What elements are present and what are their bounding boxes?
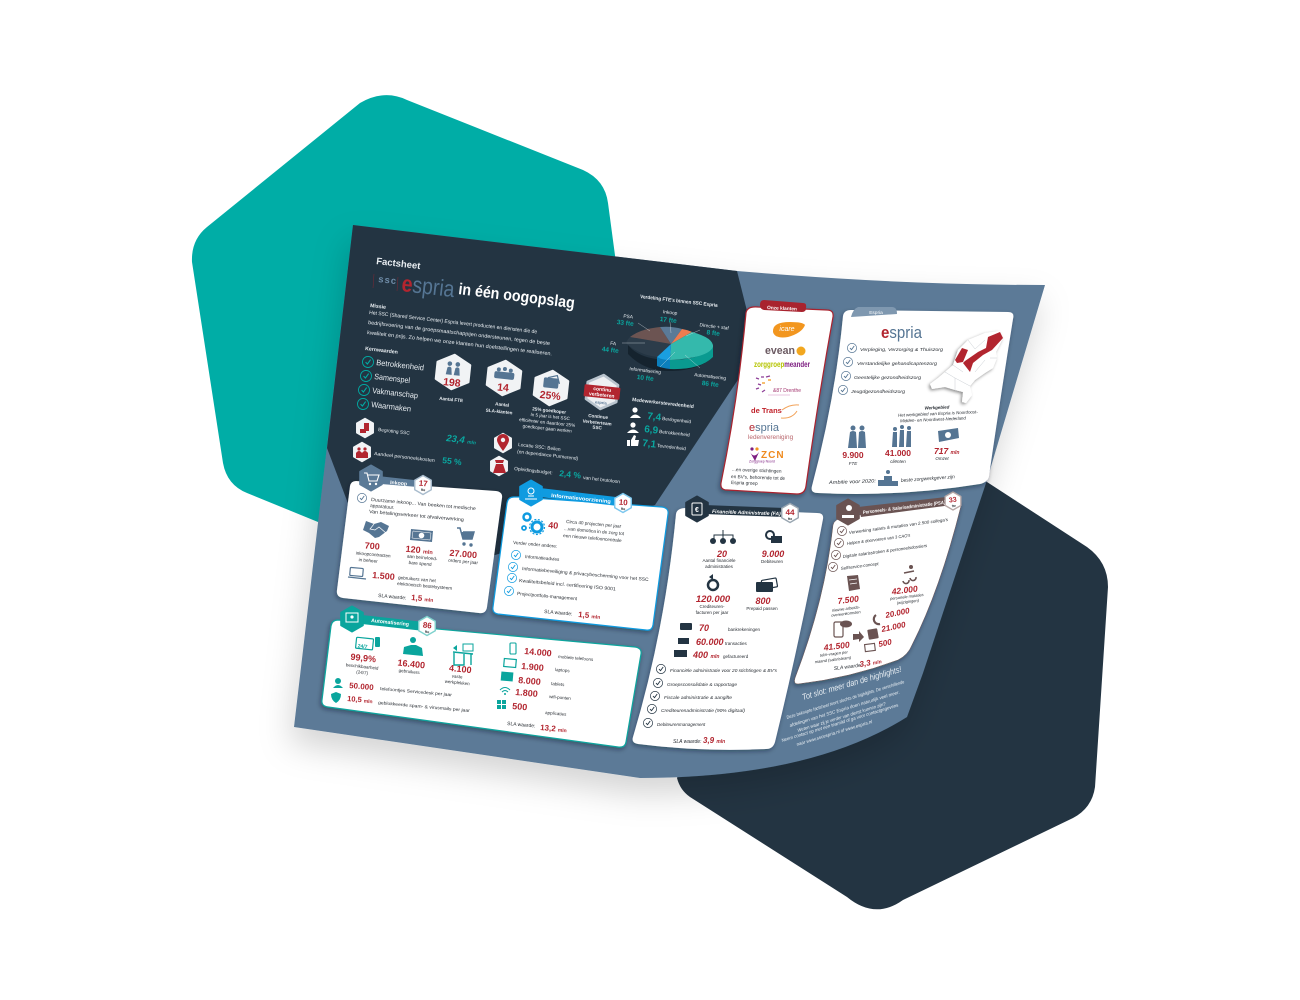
pie chart: Informatisering: [629, 366, 662, 376]
users: elektronisch bestelsysteem: [397, 581, 452, 591]
projects: [548, 519, 625, 543]
panel: espria: [812, 307, 1013, 494]
sla value: 1,5 mln: [578, 610, 601, 621]
fa list: Debiteurenmanagement: [657, 722, 706, 727]
questions: 41.500: [822, 639, 850, 653]
panel: financiële administratie: [633, 496, 823, 750]
psa list: Selfservice-concept: [840, 561, 880, 571]
inkoop contracts: inkoopcontracten: [355, 550, 391, 559]
header block: [354, 256, 730, 485]
sla value: [507, 721, 567, 734]
revenue stat: Omzet: [935, 456, 949, 461]
employee satisfaction: Betrokkenheid: [659, 429, 690, 439]
devices list: tablets: [551, 681, 565, 687]
background shape: dark hexagon: [677, 482, 1108, 909]
budget and staff costs: 23,4 mln: [445, 433, 477, 447]
availability: [346, 637, 380, 676]
logo: evean: evean: [765, 345, 795, 357]
bank rows: 60.000: [696, 637, 724, 647]
users: 1.500: [372, 570, 395, 582]
projects: 40: [548, 520, 559, 531]
stat labels: In 5 jaar is het SSC: [530, 412, 571, 421]
automatisering header: 86: [422, 621, 433, 631]
stat labels: Verbeterteam: [582, 418, 612, 427]
informatie list: Informatieadvies: [525, 554, 560, 562]
psa list: Verwerking salaris & mutaties van 2.500 collega's: [848, 517, 949, 535]
core values: Samenspel: [374, 372, 411, 385]
administrations: 20: [716, 549, 727, 559]
espria tab: [851, 307, 897, 317]
employee satisfaction: Tevredenheid: [657, 443, 686, 452]
mission text: [367, 303, 552, 357]
logo: zcn: Zorggroep Noord: [749, 460, 775, 464]
panel: onze klanten: [721, 300, 833, 494]
budget and staff costs: Aandeel personeelskosten: [374, 451, 435, 464]
inkoop contracts: 700: [364, 540, 380, 552]
psa header: fte: [952, 504, 956, 508]
stat labels: Continue: [588, 413, 609, 420]
stat hex: cheaper: 25%: [539, 389, 562, 403]
inkoop text: [357, 493, 476, 523]
employment contracts: 7.500: [837, 593, 860, 606]
projects: een nieuwe telefooncentrale: [563, 533, 622, 543]
automatisering header: Automatisering: [371, 618, 409, 628]
pie chart: 17 fte: [659, 316, 677, 325]
availability: 99,9%: [350, 652, 377, 664]
location and training budget: [491, 434, 621, 485]
werkgebied: Midden- en Noordwest-Nederland: [900, 416, 967, 423]
werkgebied: Werkgebied: [924, 404, 950, 411]
badge: continu verbeteren: espria: [595, 399, 608, 406]
devices list: 14.000: [524, 646, 552, 658]
logo: ssc espria: [373, 270, 456, 302]
mutations: [889, 565, 924, 605]
informatie header: fte: [621, 507, 625, 511]
pie chart: 33 fte: [616, 319, 634, 328]
informatie list: Informatiebeveiliging & privacybescherming voor het SSC: [522, 566, 650, 582]
orders: 27.000: [449, 548, 477, 560]
budget and staff costs: 55 %: [442, 455, 463, 467]
mission text: Het SSC (Shared Service Center) Espria levert producten en diensten die de: [369, 310, 537, 335]
stat hex: cheaper: [533, 369, 569, 407]
inkoop text: Duurzame inkoop... Van beeken tot medische: [371, 497, 476, 512]
employee satisfaction: 7,1: [642, 438, 657, 451]
core values: [357, 346, 424, 414]
factsheet sheet: [294, 225, 1045, 778]
informatie list: Verder onder andere:: [513, 540, 557, 549]
spend: aan beïnvloed-: [407, 554, 438, 561]
creditors: 120.000: [696, 594, 731, 605]
bank rows: [674, 623, 761, 660]
stat hex: SLA clients: [486, 359, 522, 397]
badge: continu verbeteren: continu: [593, 386, 612, 394]
psa list: [828, 517, 949, 572]
closing text: Tot slot: meer dan de highlights!: [801, 664, 903, 702]
espria logo: espria: [881, 323, 922, 342]
inkoop text: apparatuur.: [370, 503, 395, 511]
fa header: [686, 496, 798, 522]
questions: tel/e-vragen per: [820, 649, 849, 658]
werkgebied: [898, 404, 978, 423]
closing text: Neem contact op met een teamlid of ga voor contactgegevens: [781, 702, 900, 743]
mutations: (wijzigingen): [896, 598, 920, 605]
bank rows: transacties: [725, 641, 748, 646]
clients stat: 41.000: [885, 448, 911, 458]
bank rows: 70: [699, 623, 709, 633]
sla value: [834, 656, 882, 672]
contact channels: 20.000: [884, 606, 911, 620]
espria list: [838, 343, 943, 395]
panel: automatisering: [322, 606, 641, 747]
sla value: SLA waarde:: [378, 593, 407, 601]
location and training budget: Opleidingsbudget:: [514, 466, 553, 476]
helpdesk and spam rows: geblokkeerde spam- & virusmails per jaar: [378, 700, 471, 713]
stat labels: Aantal: [495, 401, 509, 408]
stat labels: Aantal FTE: [439, 396, 463, 403]
logo: icare: icare: [779, 326, 795, 333]
klanten note: Espria groep: [731, 480, 758, 486]
questions: maand (salaristeam): [814, 655, 852, 664]
klanten tab: Onze klanten: [767, 305, 797, 313]
logo: ssc espria: ssc: [378, 274, 398, 287]
sla value: [544, 609, 601, 621]
inkoop contracts: [355, 521, 391, 564]
logo: drenthe: [756, 376, 801, 395]
logo: espria ledenvereniging: ledenvereniging: [748, 434, 794, 441]
inkoop contracts: in beheer: [358, 557, 378, 564]
users: 16.400: [397, 658, 426, 670]
budget and staff costs: Begroting SSC: [378, 427, 411, 437]
availability: 24/7: [357, 643, 368, 650]
sla value: [378, 593, 434, 604]
panel: inkoop: [337, 466, 502, 613]
sla value: SLA waarde:: [834, 662, 863, 672]
label: factsheet: Factsheet: [376, 256, 422, 272]
users: gebruikers van het: [398, 575, 437, 583]
core values: Betrokkenheid: [376, 358, 424, 373]
espria tab: Espria: [869, 310, 883, 316]
orders: orders per jaar: [448, 558, 479, 565]
fa header: €: [695, 507, 699, 514]
espria list: Jeugdgezondheidszorg: [850, 389, 905, 395]
klanten note: ...en overige stichtingen: [732, 467, 782, 474]
debtors: [761, 530, 784, 564]
sla value: 13,2 mln: [540, 723, 567, 734]
devices list: mobiele telefoons: [558, 654, 594, 662]
background shape: teal hexagon: [192, 95, 625, 522]
availability: beschikbaarheid: [346, 662, 379, 671]
map of the netherlands: [930, 331, 1003, 403]
prepaid cards: Prepaid passen: [746, 606, 778, 611]
psa list: Digitale salarisstroken & personeelsdossiers: [842, 543, 928, 559]
fa header: Financiële Administratie (FA): [712, 509, 781, 517]
title: in één oogopslag: [458, 281, 576, 312]
psa header: [837, 492, 961, 524]
sla value: [673, 736, 725, 745]
pie chart: 44 fte: [601, 346, 619, 355]
closing text: afdelingen van het SSC Espria doen natuurlijk veel meer.: [789, 690, 900, 728]
creditors: Crediteuren-: [699, 604, 725, 609]
pie chart: [601, 294, 730, 389]
helpdesk and spam rows: [331, 678, 471, 713]
bank rows: bankrekeningen: [728, 627, 761, 632]
debtors: 9.000: [762, 549, 784, 559]
espria list: Verstandelijke gehandicaptenzorg: [857, 361, 937, 367]
inkoop header: 17: [418, 479, 429, 488]
dark header area: [327, 225, 757, 556]
budget and staff costs: [354, 418, 477, 467]
sla value: SLA waarde:: [507, 721, 536, 729]
psa header: Personeels- & Salarisadministratie (PSA): [863, 500, 946, 516]
sla value: SLA waarde:: [544, 609, 573, 617]
employee satisfaction: Medewerkerstevredenheid: [632, 397, 694, 410]
logo: espria ledenvereniging: espria: [749, 422, 780, 434]
fa header: fte: [788, 517, 792, 521]
employee satisfaction: 7,4: [647, 411, 662, 424]
fa list: Crediteurenadministratie (90% digitaal): [661, 708, 746, 713]
stat labels: [439, 396, 612, 434]
informatie header: 10: [618, 498, 629, 507]
klanten note: [731, 467, 786, 486]
fa list: Financiële administratie voor 20 stichtingen & BV's: [670, 668, 778, 673]
espria list: Verpleging, Verzorging & Thuiszorg: [860, 347, 943, 353]
mission text: bedrijfsvoering van de groepsmaatschappijen ondersteunen, tegen de beste: [368, 320, 550, 347]
ambition: Ambitie voor 2020:: [828, 478, 877, 486]
logo: drenthe: &87 Drenthe: [773, 388, 801, 394]
workplaces: [444, 644, 473, 686]
bank rows: 400 mln: [692, 650, 719, 660]
spend: [405, 529, 438, 567]
stat hex: FTE: 198: [443, 376, 461, 390]
panel: informatievoorziening: [493, 480, 668, 630]
panel: personeels- en salarisadministratie: [794, 492, 961, 684]
core values: Vakmanschap: [372, 386, 419, 400]
devices list: [497, 643, 594, 717]
stat labels: 25% goedkoper: [532, 406, 567, 415]
mutations: personele mutaties: [889, 592, 924, 601]
sla value: SLA waarde:: [673, 739, 702, 745]
informatie header: [520, 480, 631, 512]
klanten note: en BV's, behorende tot de: [731, 474, 786, 481]
fa list: Groepsconsolidatie & rapportage: [667, 682, 738, 687]
stat hex: SLA clients: 14: [497, 381, 510, 395]
automatisering header: [341, 606, 435, 636]
devices list: applicaties: [545, 710, 567, 717]
debtors: Debiteuren: [761, 559, 784, 564]
prepaid cards: 800: [755, 596, 771, 606]
fte stat: FTE: [849, 461, 858, 466]
devices list: wifi-punten: [549, 694, 572, 701]
creditors: facturen per jaar: [696, 610, 729, 615]
psa list: Helpen & doorvoeren van 3 CAO's: [846, 533, 911, 546]
core values: Waarmaken: [371, 400, 412, 414]
stat labels: goedkoper gaan werken: [522, 423, 572, 434]
inkoop text: Van betalingsverkeer tot afvalverwerking: [369, 509, 464, 523]
logo: zcn: ZCN: [761, 450, 785, 461]
spend: 120 mln: [405, 544, 434, 556]
employee satisfaction: [627, 397, 694, 452]
informatie list: Kwaliteitsbeleid incl. certificering ISO 9001: [519, 578, 616, 591]
fte stat: 9.900: [842, 450, 864, 460]
devices list: 1.800: [515, 687, 538, 699]
workplaces: 4.100: [449, 663, 472, 675]
revenue stat: 717 mln: [934, 446, 959, 456]
mutations: 42.000: [890, 583, 918, 597]
inkoop header: [360, 466, 431, 494]
users: [348, 567, 452, 591]
location and training budget: Locatie SSC: Beilen: [518, 442, 561, 453]
helpdesk and spam rows: 10,5 mln: [347, 694, 373, 705]
administrations: administraties: [705, 564, 734, 569]
inkoop header: Inkoop: [390, 480, 407, 487]
location and training budget: (en dependance Purmerend): [517, 449, 579, 462]
stat hex: FTE: [435, 353, 471, 391]
pie chart: 86 fte: [701, 380, 719, 389]
bank rows: gefactureerd: [723, 654, 749, 659]
administrations: [702, 530, 736, 569]
logo: de trans: de Trans: [751, 406, 782, 415]
logo: zcn: [749, 447, 785, 464]
workplaces: vaste: [452, 673, 463, 680]
automatisering header: fte: [425, 630, 429, 634]
fte stat: [842, 426, 866, 466]
administrations: Aantal financiële: [702, 558, 736, 563]
employment contracts: nieuwe arbeids-: [831, 604, 861, 613]
pie chart: Verdeling FTE's binnen SSC Espria: [640, 294, 718, 309]
pie chart: PSA: [623, 313, 634, 321]
mission text: kwaliteit en prijs. Zo helpen we onze klanten hun doelstellingen te realiseren.: [367, 330, 552, 357]
devices list: 1.900: [521, 661, 544, 673]
creditors: [696, 574, 731, 615]
users: gebruikers: [398, 668, 421, 675]
location and training budget: 2,4 %: [559, 468, 582, 481]
orders: [448, 528, 479, 565]
contact channels: 21.000: [880, 620, 907, 634]
employee satisfaction: Bevlogenheid: [662, 416, 692, 425]
helpdesk and spam rows: telefoontjes Servicedesk per jaar: [380, 686, 453, 697]
mission text: Missie: [370, 303, 386, 311]
employment contracts: [831, 575, 862, 618]
fa header: 44: [786, 508, 795, 517]
revenue stat: [934, 428, 959, 461]
logo: zorggroep meander: zorggroepmeander: [754, 360, 810, 369]
pie chart: Automatisering: [694, 372, 727, 382]
pie chart: 8 fte: [706, 329, 721, 338]
stat labels: efficiënter en daardoor 25%: [519, 417, 575, 428]
workplaces: werkplekken: [444, 679, 470, 686]
pie chart: 10 fte: [636, 374, 654, 383]
users: [397, 637, 426, 675]
clients stat: cliënten: [890, 459, 906, 464]
pie chart: Inkoop: [663, 309, 678, 317]
devices list: laptops: [555, 667, 571, 673]
pie chart: Directie + staf: [699, 322, 730, 332]
informatie header: Informatievoorziening: [551, 493, 611, 505]
badge: continu verbeteren: [582, 373, 622, 411]
stat labels: SLA-klanten: [486, 408, 513, 415]
inkoop header: fte: [421, 488, 425, 492]
prepaid cards: [746, 578, 778, 611]
logo: icare: [773, 322, 805, 337]
helpdesk and spam rows: 50.000: [349, 681, 375, 692]
questions: [814, 620, 864, 664]
psa header: 33: [949, 497, 957, 504]
employment contracts: overeenkomsten: [831, 609, 862, 618]
contact channels: [865, 606, 911, 652]
informatie list: Projectportfolio-management: [517, 591, 578, 601]
fa list: Fiscale administratie & aangifte: [664, 695, 733, 700]
logo: de trans: [751, 405, 799, 418]
closing text: naar www.sscespria.nl of www.espria.nl: [796, 719, 874, 747]
badge: continu verbeteren: verbeteren: [589, 391, 615, 400]
werkgebied: Het werkgebied van Espria is Noordoost-: [898, 409, 978, 418]
contact channels: 500: [878, 637, 893, 649]
closing text: Weten waar zij je verder van dienst kunnen zijn?: [797, 701, 887, 733]
logo: espria ledenvereniging: [748, 422, 794, 441]
employee satisfaction: 6,9: [644, 424, 659, 437]
logo: ssc espria: espria: [400, 270, 456, 302]
projects: ...van domotica in de zorg tot: [564, 526, 625, 536]
core values: Kernwaarden: [365, 346, 398, 356]
sla value: 3,9 mln: [703, 736, 725, 745]
stat labels: SSC: [592, 425, 603, 431]
ambition: beste zorgwerkgever zijn: [901, 474, 955, 484]
sla value: 1,5 mln: [411, 593, 434, 604]
pie chart: FA: [610, 341, 617, 347]
gears: [522, 514, 544, 534]
klanten tab: [760, 300, 806, 313]
ambition: [828, 470, 955, 486]
location and training budget: van het brutoloon: [583, 475, 621, 485]
closing text: [781, 664, 905, 747]
devices list: 500: [512, 701, 528, 712]
devices list: 8.000: [518, 675, 541, 687]
sla value: 3,3 mln: [859, 656, 882, 669]
espria list: Geestelijke gezondheidszorg: [854, 375, 921, 381]
closing text: Deze beknopte factsheet toont slechts de highlights. De verschillende: [786, 679, 905, 720]
clients stat: [885, 425, 911, 464]
fa list: [643, 664, 778, 728]
informatie list: [504, 540, 650, 601]
spend: bare spend: [408, 560, 432, 567]
availability: (24/7): [356, 669, 369, 676]
projects: Circa 40 projecten per jaar: [566, 519, 622, 529]
